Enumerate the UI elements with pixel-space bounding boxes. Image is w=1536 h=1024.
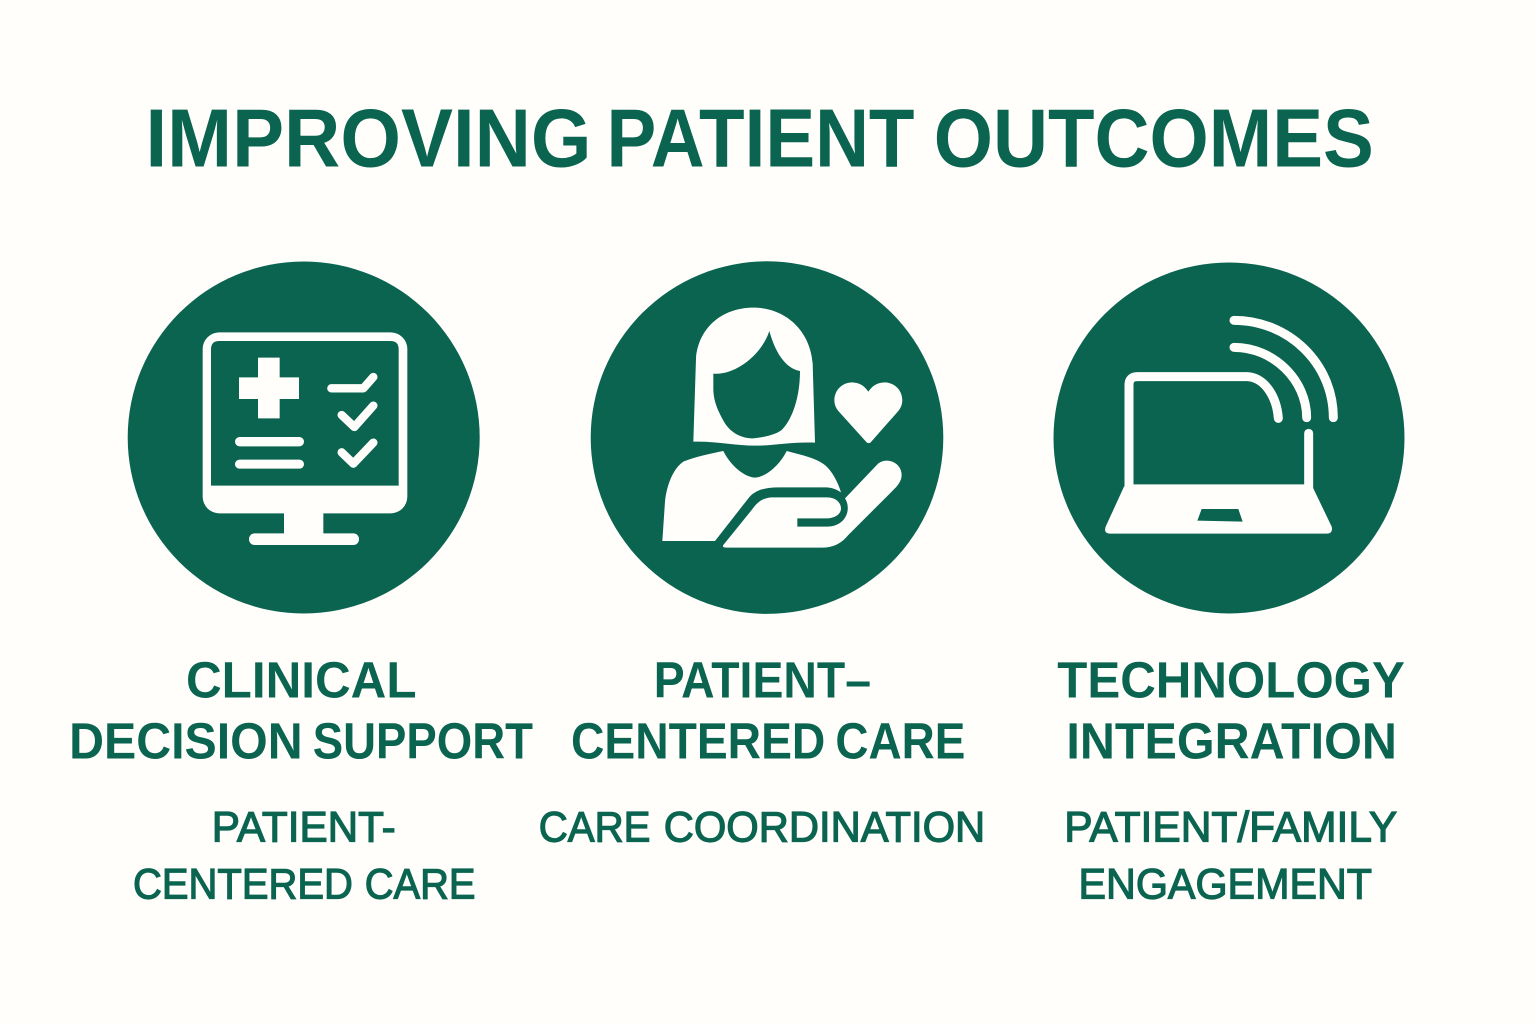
- heading: clinical decision support: DECISION: [69, 713, 303, 770]
- heading: technology integration: TECHNOLOGY: [1057, 652, 1405, 709]
- heading: patient-centered care: [571, 652, 965, 770]
- heading: clinical decision support: SUPPORT: [313, 713, 533, 770]
- subheading: patient/family engagement: [1064, 804, 1397, 907]
- subheading: patient-centered care: [133, 804, 476, 907]
- laptop base: [1105, 484, 1332, 534]
- subheading: care coordination: COORDINATION: [664, 804, 985, 851]
- title: OUTCOMES: [934, 93, 1374, 185]
- circle: technology integration: [1054, 262, 1404, 614]
- heading: patient-centered care: CARE: [835, 713, 965, 770]
- heading: technology integration: INTEGRATION: [1066, 713, 1397, 770]
- title: [146, 93, 1374, 185]
- laptop lid and signal arcs: [1129, 320, 1333, 488]
- title: PATIENT: [606, 93, 914, 185]
- subheading: patient/family engagement: ENGAGEMENT: [1078, 860, 1372, 907]
- text lines: [235, 437, 304, 469]
- heading: patient-centered care: PATIENT–: [654, 652, 871, 709]
- shoulders and body: [662, 451, 841, 541]
- heading: clinical decision support: CLINICAL: [186, 652, 416, 709]
- subheading: care coordination: CARE: [539, 804, 650, 851]
- heading: technology integration: [1057, 652, 1405, 770]
- icon: laptop with wireless signal: [1105, 320, 1333, 534]
- open hand: [723, 461, 902, 548]
- subheading: patient-centered care: CARE: [365, 860, 476, 907]
- subheading: patient-centered care: PATIENT-: [212, 804, 396, 851]
- panel: technology integration: [1054, 262, 1405, 907]
- subheading: patient/family engagement: PATIENT/FAMILY: [1064, 804, 1397, 851]
- monitor stand: [284, 512, 323, 535]
- title: IMPROVING: [146, 93, 592, 185]
- hair and face: [693, 308, 815, 446]
- heading: patient-centered care: CENTERED: [571, 713, 825, 770]
- trackpad: [1197, 509, 1243, 522]
- subheading: patient-centered care: CENTERED: [133, 860, 353, 907]
- panel: patient-centered care: [539, 261, 985, 851]
- monitor body: [203, 332, 407, 513]
- panel: clinical decision support: [69, 262, 533, 907]
- checklist marks: [331, 377, 373, 464]
- icon: computer monitor with medical checklist: [203, 332, 407, 545]
- heading: clinical decision support: [69, 652, 533, 770]
- icon: woman with heart over open hand: [662, 308, 902, 548]
- medical cross: [239, 358, 299, 418]
- circle: clinical decision support: [128, 262, 480, 614]
- monitor screen: [211, 341, 399, 486]
- monitor base: [249, 533, 359, 545]
- heart: [834, 382, 902, 443]
- circle: patient-centered care: [591, 261, 943, 614]
